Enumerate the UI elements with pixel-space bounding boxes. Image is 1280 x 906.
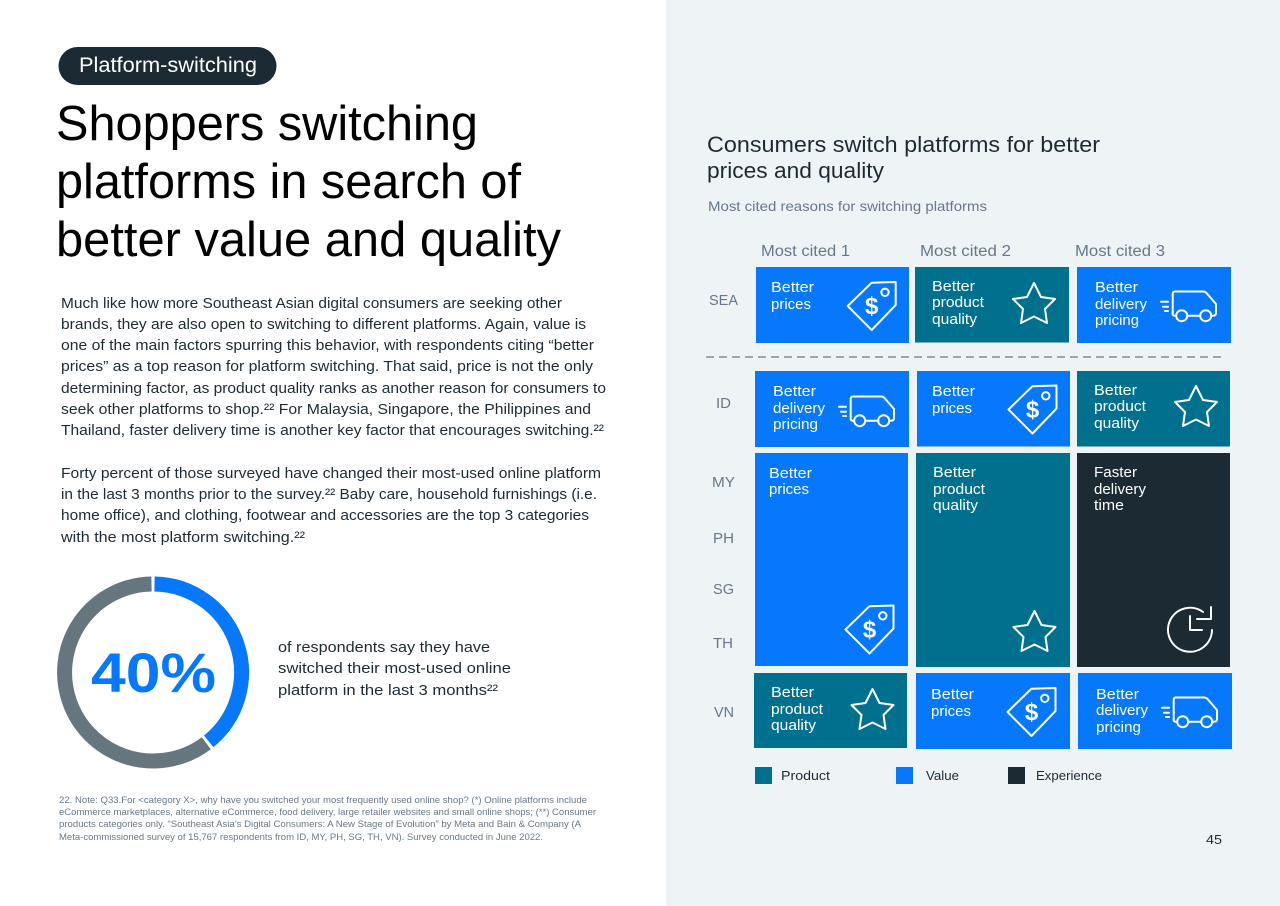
text block: intro paragraph: one of the main factors spurring this behavior, with respondents citing “better	[61, 337, 594, 354]
tag: Platform-switching	[58, 47, 276, 85]
legend: Product	[781, 768, 830, 783]
row labels: MY	[712, 475, 735, 491]
cell: SEA most cited 3, better delivery pricing: Better	[1095, 280, 1138, 296]
icon: delivery van	[1161, 292, 1216, 321]
cell: MY PH SG TH most cited 2, better product quality: Better	[933, 465, 976, 481]
cell: VN most cited 2, better prices: prices	[931, 704, 971, 720]
tag: Platform-switching: Platform-switching	[79, 54, 257, 77]
footnote	[59, 795, 596, 842]
chart subtitle: Most cited reasons for switching platforms	[708, 198, 987, 214]
cell: ID most cited 1, better delivery pricing: delivery	[773, 401, 826, 417]
icon: star	[852, 689, 894, 729]
column headers: Most cited 2	[920, 243, 1011, 260]
title: platforms in search of	[56, 155, 521, 209]
cell: ID most cited 2, better prices: prices	[932, 401, 972, 417]
cell: VN most cited 3, better delivery pricing: delivery	[1096, 703, 1149, 719]
row labels: ID	[716, 396, 731, 412]
text block: intro paragraph: seek other platforms to shop.²² For Malaysia, Singapore, the Philippines and	[61, 401, 591, 418]
cell: SEA most cited 1, better prices	[756, 267, 909, 343]
cell: VN most cited 1, better product quality: quality	[771, 718, 817, 734]
text block: second paragraph: home office), and clothing, footwear and accessories are the top 3 categories	[61, 507, 589, 524]
column headers	[761, 243, 1165, 260]
footnote: eCommerce marketplaces, alternative eCommerce, food delivery, large retailer websites and small online shops; (**) Consumer	[59, 807, 596, 817]
cell: ID most cited 2, better prices: Better	[932, 384, 975, 400]
icon: star	[1013, 283, 1055, 323]
row labels: SG	[713, 582, 734, 598]
cell: SEA most cited 3, better delivery pricing	[1077, 267, 1231, 343]
text block: intro paragraph: prices” as a top reason for platform switching. That said, price is not the only	[61, 358, 594, 375]
icon: price tag: $	[1025, 699, 1039, 726]
page number: 45	[1206, 832, 1222, 847]
cell: VN most cited 3, better delivery pricing: Better	[1096, 687, 1139, 703]
legend: Experience	[1036, 768, 1102, 783]
row labels: VN	[714, 705, 734, 721]
text block: donut caption: switched their most-used online	[278, 660, 511, 677]
icon: price tag	[846, 606, 894, 654]
text block: second paragraph: in the last 3 months prior to the survey.²² Baby care, household furnishings (i.e.	[61, 486, 597, 503]
icon: star	[1014, 611, 1056, 651]
legend	[755, 767, 1102, 784]
text block: donut caption: of respondents say they have	[278, 639, 490, 656]
text block: donut caption	[278, 639, 511, 699]
icon: delivery van	[1162, 698, 1217, 727]
cell: SEA most cited 3, better delivery pricing: pricing	[1095, 313, 1139, 329]
cell: MY PH SG TH most cited 1, better prices	[755, 453, 908, 666]
chart heading	[707, 132, 1100, 183]
donut chart: 40%	[65, 584, 242, 761]
cell: MY PH SG TH most cited 1, better prices: prices	[769, 482, 809, 498]
footnote: products categories only. “Southeast Asia’s Digital Consumers: A New Stage of Evolution” by Meta and Bain & Company (A	[59, 819, 582, 829]
text block: intro paragraph	[61, 295, 606, 439]
text block: second paragraph	[60, 465, 601, 546]
icon: price tag: $	[863, 616, 877, 644]
cell: ID most cited 1, better delivery pricing	[755, 371, 909, 447]
cell: VN most cited 1, better product quality	[754, 673, 907, 748]
row labels: PH	[713, 531, 734, 547]
column headers: Most cited 1	[761, 243, 850, 260]
text block: intro paragraph: brands, they are also open to switching to different platforms. Again, value is	[61, 316, 586, 333]
icon: clock	[1168, 607, 1212, 652]
icon: price tag	[1008, 386, 1056, 434]
cell: MY PH SG TH most cited 2, better product quality: quality	[933, 498, 979, 514]
cell: SEA most cited 2, better product quality: product	[932, 295, 984, 311]
cell: MY PH SG TH most cited 2, better product quality	[916, 453, 1070, 667]
text block: intro paragraph: determining factor, as product quality ranks as another reason for consumers to	[61, 380, 606, 397]
row labels	[709, 293, 738, 721]
donut chart: 40%: 40%	[91, 641, 216, 704]
cell: MY PH SG TH most cited 3, faster delivery time: time	[1094, 498, 1124, 514]
cell: SEA most cited 2, better product quality	[915, 267, 1069, 342]
row labels: TH	[713, 636, 733, 652]
cell: ID most cited 1, better delivery pricing: Better	[773, 384, 816, 400]
cell: VN most cited 2, better prices	[916, 673, 1070, 749]
cell: MY PH SG TH most cited 3, faster delivery time: delivery	[1094, 482, 1147, 498]
cell: SEA most cited 3, better delivery pricing: delivery	[1095, 297, 1148, 313]
cell: MY PH SG TH most cited 2, better product quality: product	[933, 482, 985, 498]
text block: second paragraph: Forty percent of those surveyed have changed their most-used online platform	[61, 465, 601, 482]
title: better value and quality	[56, 213, 561, 267]
cell: ID most cited 3, better product quality: Better	[1094, 383, 1137, 399]
chart heading: Consumers switch platforms for better	[707, 132, 1100, 157]
panel: right background	[666, 0, 1280, 906]
cell: ID most cited 3, better product quality: quality	[1094, 416, 1140, 432]
row labels: SEA	[709, 293, 738, 309]
cell: SEA most cited 2, better product quality: Better	[932, 279, 975, 295]
cell: MY PH SG TH most cited 3, faster delivery time	[1077, 453, 1230, 667]
cell: MY PH SG TH most cited 3, faster delivery time: Faster	[1094, 465, 1137, 481]
cell: VN most cited 1, better product quality: product	[771, 702, 823, 718]
cell: VN most cited 3, better delivery pricing: pricing	[1096, 720, 1141, 736]
icon: price tag	[1008, 688, 1056, 736]
icon: delivery van	[839, 396, 894, 426]
text block: intro paragraph: Thailand, faster delivery time is another key factor that encourages switching.²²	[61, 422, 604, 439]
cell: SEA most cited 1, better prices: prices	[771, 297, 811, 313]
title: Shoppers switching	[56, 97, 478, 151]
text block: second paragraph: with the most platform switching.²²	[60, 529, 305, 546]
footnote: Meta-commissioned survey of 15,767 respondents from ID, MY, PH, SG, TH, VN). Survey conducted in June 2022.	[59, 832, 543, 842]
icon: price tag: $	[865, 293, 879, 320]
cell: SEA most cited 1, better prices: Better	[771, 280, 814, 296]
text block: donut caption: platform in the last 3 months²²	[278, 682, 498, 699]
title	[56, 97, 561, 267]
icon: price tag: $	[1026, 396, 1040, 424]
cell: VN most cited 3, better delivery pricing	[1078, 673, 1232, 749]
cell: SEA most cited 2, better product quality: quality	[932, 312, 978, 328]
column headers: Most cited 3	[1075, 243, 1165, 260]
text block: intro paragraph: Much like how more Southeast Asian digital consumers are seeking other	[61, 295, 562, 312]
cell: MY PH SG TH most cited 1, better prices: Better	[769, 466, 812, 482]
footnote: 22. Note: Q33.For <category X>, why have you switched your most frequently used online shop? (*) Online platforms include	[59, 795, 587, 805]
icon: price tag	[848, 282, 896, 330]
cell: VN most cited 2, better prices: Better	[931, 687, 974, 703]
cell: ID most cited 2, better prices	[917, 371, 1070, 446]
icon: star	[1175, 386, 1217, 426]
chart heading: prices and quality	[707, 158, 884, 183]
cell: ID most cited 1, better delivery pricing: pricing	[773, 417, 818, 433]
legend: Value	[926, 768, 959, 783]
cell: ID most cited 3, better product quality	[1077, 371, 1230, 446]
cell: ID most cited 3, better product quality: product	[1094, 399, 1146, 415]
cell: VN most cited 1, better product quality: Better	[771, 685, 814, 701]
